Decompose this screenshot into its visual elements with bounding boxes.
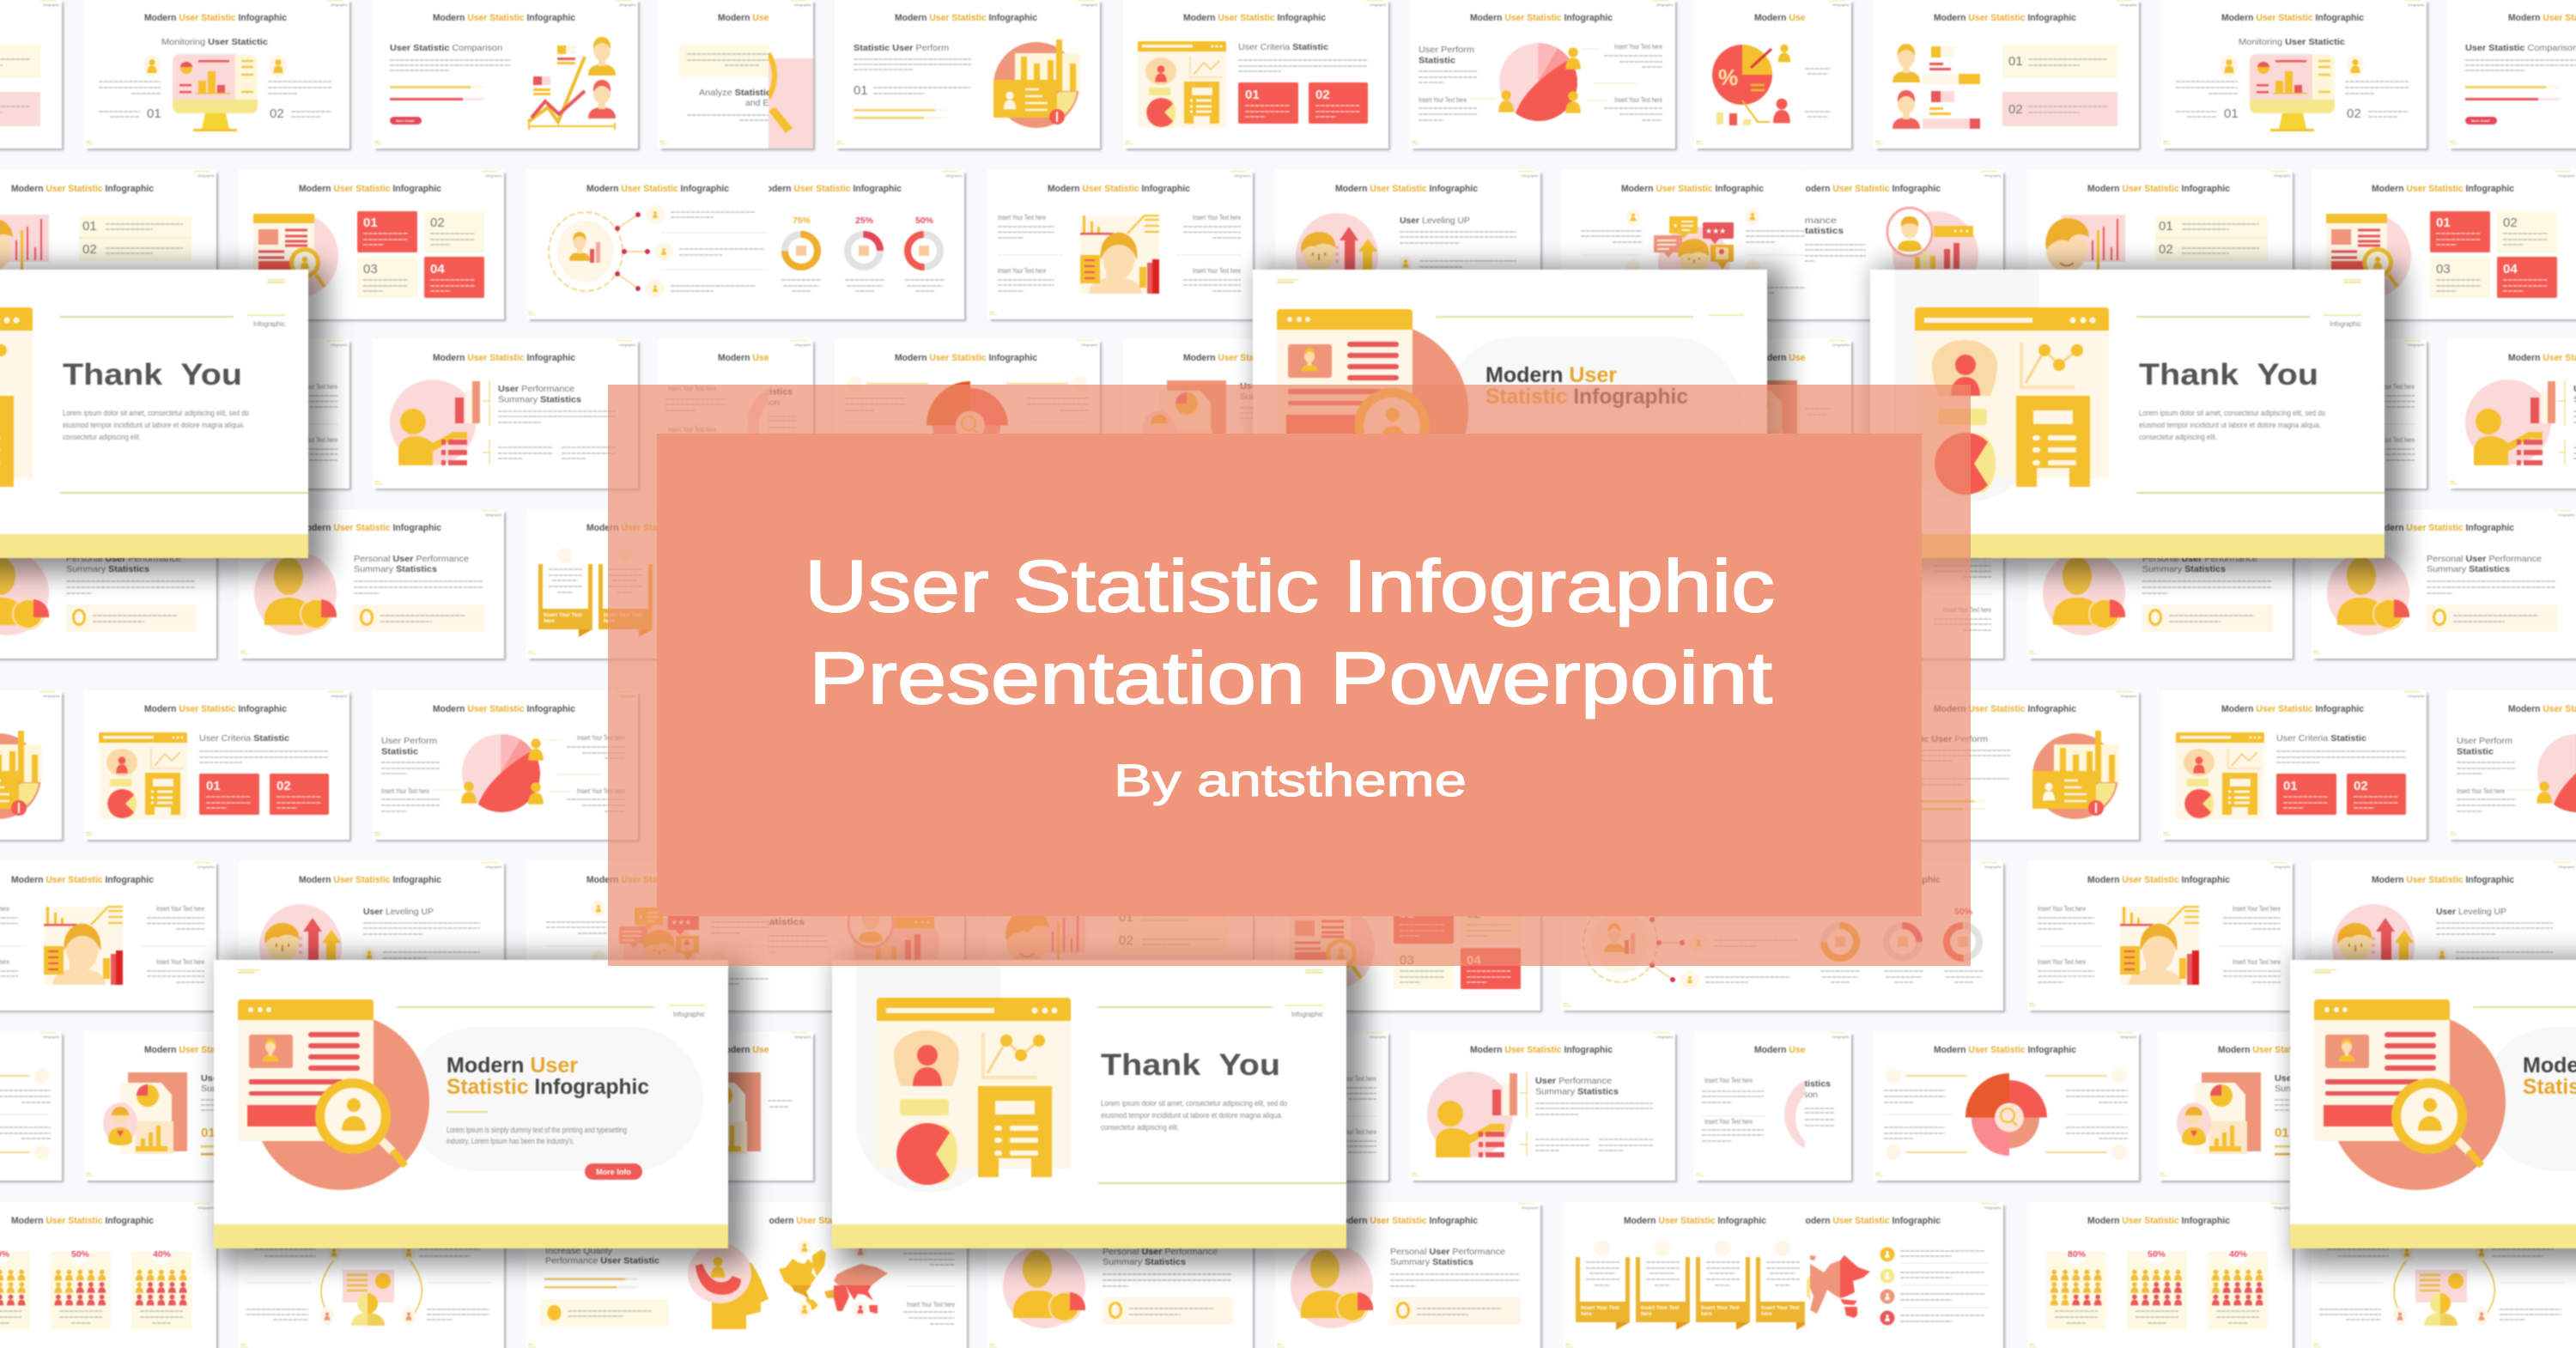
large card: thank you, bottom centre <box>832 956 1364 1264</box>
slide: increase quality, clipped <box>527 1245 769 1348</box>
slide: ellipse diagram <box>2312 1202 2576 1348</box>
large card: modern user statistic, top centre <box>1253 266 1785 574</box>
thank you body text <box>2139 409 2325 442</box>
slide: monitoring user statistic: Modern User Statistic Infographic <box>2221 13 2364 23</box>
slide row 2 <box>0 170 2576 321</box>
slide: world map with insert text <box>762 1216 970 1348</box>
slide: crescent, left part: Modern User Statistic Infographic <box>1754 1045 1897 1055</box>
infographic tag: Infographic <box>1291 1011 1323 1018</box>
slide: bars 01 02 <box>987 861 1255 1012</box>
slide: monitoring user statistic <box>2161 0 2428 150</box>
large card: thank you, left <box>0 266 326 574</box>
slide: user statistic comparison: Modern User Statistic Infographic <box>433 13 575 23</box>
slide: four boxes: Modern User Statistic Infographic <box>299 184 441 194</box>
slide: crescent, left part <box>1695 1045 1897 1184</box>
slide: chat, clipped: Modern User Statistic Infographic <box>586 875 729 885</box>
slide: percent pie, left part <box>1695 13 1897 152</box>
slide: world map list, clipped <box>1798 1202 2007 1348</box>
slide: personal user performance <box>2027 509 2294 660</box>
slide: donut percentages, clipped: Modern User Statistic Infographic <box>759 184 902 194</box>
more info button <box>585 1163 642 1180</box>
slide: insert text with head <box>987 170 1255 321</box>
slide: donut percentages, clipped: Modern User Statistic Infographic <box>1798 875 1941 885</box>
slide: user perform pie: Modern User Statistic Infographic <box>1470 13 1613 23</box>
slide: bars 01 02: Modern User Statistic Infographic <box>11 184 154 194</box>
slide: right fragment <box>768 1031 817 1184</box>
slide: user criteria statistic <box>84 690 351 841</box>
solid centre title panel <box>657 434 1922 916</box>
slide: half circle diagram: Modern User Statistic Infographic <box>895 353 1037 363</box>
slide: insert text with head: Modern User Statistic Infographic <box>1048 184 1190 194</box>
slide: user performance summary <box>2448 339 2576 490</box>
card body text: Lorem Ipsum is simply dummy text of the printing and typesetting <box>447 1126 627 1135</box>
slide: user performance summary <box>373 339 640 490</box>
slide: document summary, clipped <box>718 1045 860 1184</box>
slide: user perform pie <box>2448 690 2576 841</box>
slide: insert text: Modern User Statistic Infographic <box>2221 353 2364 363</box>
slide: world map list, clipped: Modern User Statistic Infographic <box>1798 1216 1941 1226</box>
slide: half circle diagram <box>1874 1031 2141 1182</box>
slide: user leveling up: Modern User Statistic Infographic <box>1335 184 1478 194</box>
infographic tag: Infographic <box>253 320 285 328</box>
slide: four boxes <box>1275 861 1542 1012</box>
slide: user leveling up: Modern User Statistic Infographic <box>2372 875 2514 885</box>
thank you body text: consectetur adipiscing elit. <box>1101 1123 1179 1132</box>
slide: analyze statistics, left part: Modern User Statistic Infographic <box>718 13 860 23</box>
main title line 1: User Statistic Infographic <box>805 546 1775 628</box>
slide: chat, clipped: Modern User Statistic Infographic <box>1621 184 1764 194</box>
small dash under title <box>447 1111 488 1113</box>
slide: analyze statistics, right part <box>768 0 817 152</box>
slide: four boxes <box>2312 170 2576 321</box>
thank you body text: Lorem ipsum dolor sit amet, consectetur adipiscing elit, sed do <box>1101 1099 1287 1108</box>
slide: crescent, right part <box>1804 1031 1855 1184</box>
slide: four boxes <box>239 170 506 321</box>
slide: bars 01 02 <box>2027 170 2294 321</box>
slide: crescent, left part: Modern User Statistic Infographic <box>718 353 860 363</box>
slide: user criteria statistic <box>2161 690 2428 841</box>
translucent outer overlay panel <box>608 385 1971 966</box>
slide: user statistic comparison <box>2448 0 2576 150</box>
slide: personal user performance: Modern User Statistic Infographic <box>11 523 154 533</box>
slide: user perform pie <box>373 690 640 841</box>
slide: user criteria statistic: Modern User Statistic Infographic <box>144 704 287 714</box>
slide: four callout boxes <box>526 509 793 660</box>
slide: ellipse diagram <box>239 1202 506 1348</box>
slide: personal user performance <box>1275 1202 1542 1348</box>
card title: Statistic Infographic <box>447 1075 649 1099</box>
thank you heading: Thank You <box>1101 1048 1280 1082</box>
thank you body text: eiusmod tempor incididunt ut labore et dolore magna aliqua. <box>2139 421 2321 430</box>
slide: user perform pie: Modern User Statistic Infographic <box>433 704 575 714</box>
slide row 7 <box>0 1031 2425 1182</box>
slide: people percentages <box>0 1202 218 1348</box>
slide: four callout boxes, clipped <box>1564 1216 1806 1348</box>
slide: insert text <box>1123 1031 1390 1182</box>
slide row 5 <box>0 690 2576 841</box>
slide: persons 01 02 <box>0 0 64 150</box>
slide: monitoring user statistic: Modern User Statistic Infographic <box>144 13 287 23</box>
slide: user perform pie <box>1410 0 1677 150</box>
slide: document summary <box>2158 1031 2425 1182</box>
slide: crescent, left part <box>666 353 860 434</box>
slide: chat, clipped <box>546 875 769 1014</box>
slide: user performance summary: Modern User Statistic Infographic <box>433 353 575 363</box>
card title <box>1485 363 1688 409</box>
slide: performance statistics, clipped: Modern User Statistic Infographic <box>1798 184 1941 194</box>
thank you body text: consectetur adipiscing elit. <box>2139 433 2217 442</box>
slide: donut percentages, clipped <box>759 170 968 323</box>
thank you heading: Thank You <box>63 358 242 392</box>
slide: insert text <box>2161 339 2428 490</box>
slide: network, clipped <box>527 184 769 323</box>
slide: user leveling up <box>239 861 506 1012</box>
slide: personal user performance <box>0 509 218 660</box>
slide: personal user performance <box>2312 509 2576 660</box>
card title: Modern User <box>1485 363 1617 387</box>
slide: user criteria statistic: Modern User Statistic Infographic <box>2221 704 2364 714</box>
slide: insert text <box>1738 509 2005 660</box>
slide: document summary, clipped <box>1754 353 1897 434</box>
slide: people percentages: Modern User Statistic Infographic <box>2087 1216 2230 1226</box>
slide: four callout boxes, clipped: Modern User Statistic Infographic <box>1624 1216 1766 1226</box>
thank you body text <box>63 409 249 442</box>
slide: people percentages <box>2027 1202 2294 1348</box>
slide row 4 <box>0 509 2576 660</box>
thank you body text: Lorem ipsum dolor sit amet, consectetur adipiscing elit, sed do <box>2139 409 2325 418</box>
slide: half circle diagram <box>835 339 1102 490</box>
infographic tag: Infographic <box>673 1011 705 1018</box>
slide row 1 <box>0 0 2576 150</box>
slide: insert text: Modern User Statistic Infographic <box>11 875 154 885</box>
slide: document summary: Modern User Statistic Infographic <box>1183 353 1326 363</box>
slide: statistic user perform: Modern User Statistic Infographic <box>1934 704 2076 714</box>
slide: insert text <box>0 861 218 1012</box>
thank you body text: consectetur adipiscing elit. <box>63 433 141 442</box>
slide: monitoring user statistic <box>84 0 351 150</box>
slide: insert text <box>84 339 351 490</box>
slide: crescent, right part <box>768 339 817 434</box>
slide: four boxes: Modern User Statistic Infographic <box>2372 184 2514 194</box>
slide row 8 <box>0 1202 2576 1348</box>
slide: right fragment <box>1805 339 1855 434</box>
slide: half circle diagram <box>0 1031 64 1182</box>
slide: bars 01 02: Modern User Statistic Infographic <box>2087 184 2230 194</box>
card title: Statistic Infographic <box>1485 385 1688 409</box>
slide: performance statistics, clipped <box>768 916 967 1014</box>
large card: modern user statistic, bottom right <box>2290 956 2576 1264</box>
slide: user leveling up: Modern User Statistic Infographic <box>299 875 441 885</box>
slide: analyze statistics, left part <box>659 13 860 152</box>
slide: statistic user perform <box>835 0 1102 150</box>
slide: document summary, clipped: Modern User Statistic Infographic <box>718 1045 860 1055</box>
slide: personal user performance <box>987 1202 1255 1348</box>
infographic tag: Infographic <box>2330 320 2361 328</box>
slide: statistic user perform <box>0 690 64 841</box>
slide: user performance summary: Modern User Statistic Infographic <box>1470 1045 1613 1055</box>
slide: user leveling up <box>2312 861 2576 1012</box>
slide: personal user performance: Modern User Statistic Infographic <box>299 523 441 533</box>
more info button: More Info <box>596 1168 631 1176</box>
slide: statistic user perform: Modern User Statistic Infographic <box>895 13 1037 23</box>
slide row 3 <box>84 339 2576 490</box>
slide: percent pie, left part: Modern User Statistic Infographic <box>1754 13 1897 23</box>
slide: insert text: Modern User Statistic Infographic <box>144 353 287 363</box>
slide: personal user performance: Modern User Statistic Infographic <box>2372 523 2514 533</box>
card body text: industry. Lorem Ipsum has been the industry's. <box>447 1137 574 1146</box>
slide: percent pie, right part <box>1805 0 1855 152</box>
thank you body text: Lorem ipsum dolor sit amet, consectetur adipiscing elit, sed do <box>63 409 249 418</box>
thank you heading: Thank You <box>2139 358 2318 392</box>
card title: Modern User <box>447 1054 578 1078</box>
slide: statistic user perform <box>1874 690 2141 841</box>
card title <box>2523 1054 2576 1099</box>
large card: thank you, right <box>1870 266 2403 574</box>
author byline: By antstheme <box>1114 756 1467 806</box>
slide: insert text: Modern User Statistic Infographic <box>2087 875 2230 885</box>
slide: document summary: Modern User Statistic Infographic <box>2218 1045 2360 1055</box>
slide: people percentages: Modern User Statistic Infographic <box>11 1216 154 1226</box>
slide: four callout boxes: Modern User Statistic Infographic <box>586 523 729 533</box>
slide: document summary, clipped: Modern User Statistic Infographic <box>1754 353 1897 363</box>
slide: user statistic comparison <box>373 0 640 150</box>
slide: personal user performance <box>239 509 506 660</box>
large card: modern user statistic, bottom left <box>214 956 746 1264</box>
thank you body text: eiusmod tempor incididunt ut labore et dolore magna aliqua. <box>63 421 245 430</box>
slide: network, clipped: Modern User Statistic Infographic <box>586 184 729 194</box>
thank you body text: eiusmod tempor incididunt ut labore et dolore magna aliqua. <box>1101 1111 1283 1120</box>
slide: user leveling up <box>1275 170 1542 321</box>
slide row 6 <box>0 861 2576 1012</box>
card title <box>447 1054 649 1099</box>
slide: personal user performance: Modern User Statistic Infographic <box>1335 1216 1478 1226</box>
card body text <box>447 1126 627 1146</box>
slide: user criteria statistic <box>1123 0 1390 150</box>
slide: personal user performance: Modern User Statistic Infographic <box>2087 523 2230 533</box>
slide: donut percentages, clipped <box>1798 861 2007 1014</box>
slide: user performance summary <box>1410 1031 1677 1182</box>
slide: performance statistics, clipped <box>1798 170 2007 323</box>
thank you body text <box>1101 1099 1287 1132</box>
slide: chat, clipped <box>1580 170 1806 323</box>
slide: half circle diagram: Modern User Statistic Infographic <box>1934 1045 2076 1055</box>
slide: user criteria statistic: Modern User Statistic Infographic <box>1183 13 1326 23</box>
slide: network, clipped <box>1562 916 1805 1014</box>
slide: document summary: Modern User Statistic Infographic <box>144 1045 287 1055</box>
slide: persons 01 02 <box>1874 0 2141 150</box>
slide: persons 01 02: Modern User Statistic Infographic <box>1934 13 2076 23</box>
slide: insert text <box>2027 861 2294 1012</box>
slide: document summary <box>1123 339 1390 490</box>
slide: bars 01 02 <box>0 170 218 321</box>
slide: world map with insert text: Modern User Statistic Infographic <box>762 1216 904 1226</box>
slide: document summary <box>84 1031 351 1182</box>
main title line 2: Presentation Powerpoint <box>809 638 1772 720</box>
